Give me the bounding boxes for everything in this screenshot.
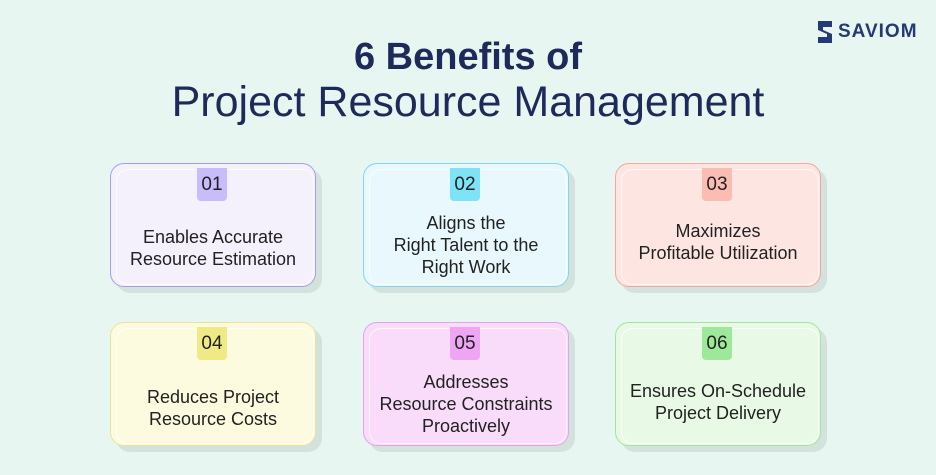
card 05: Resource Constraints bbox=[379, 394, 553, 414]
title: Project Resource Management bbox=[172, 78, 764, 126]
card 02: 02 bbox=[454, 174, 476, 195]
card 03 bbox=[615, 163, 827, 293]
logo: SAVIOM: SAVIOM bbox=[838, 21, 918, 42]
card 02: Right Talent to the bbox=[394, 235, 538, 255]
card 04 bbox=[110, 322, 322, 452]
card 04: 04 bbox=[201, 333, 223, 354]
card 03: Profitable Utilization bbox=[638, 243, 798, 263]
card 03: Maximizes bbox=[675, 221, 760, 241]
card 05 bbox=[363, 322, 575, 452]
card 02 bbox=[363, 163, 575, 293]
card 05: 05 bbox=[454, 333, 476, 354]
card 06: Project Delivery bbox=[655, 403, 781, 423]
card 01: Enables Accurate bbox=[143, 227, 283, 247]
card 05: Addresses bbox=[423, 372, 509, 392]
title bbox=[172, 36, 764, 126]
card 01: 01 bbox=[201, 174, 223, 195]
card 05: Proactively bbox=[422, 416, 510, 436]
card 06: Ensures On-Schedule bbox=[630, 381, 806, 401]
card 04: Resource Costs bbox=[149, 409, 277, 429]
card 02: Right Work bbox=[422, 257, 510, 277]
card 06 bbox=[615, 322, 827, 452]
card 01 bbox=[110, 163, 322, 293]
card 01: Resource Estimation bbox=[130, 249, 296, 269]
card 02: Aligns the bbox=[426, 213, 506, 233]
title: 6 Benefits of bbox=[354, 36, 582, 78]
card 06: 06 bbox=[706, 333, 728, 354]
card 03: 03 bbox=[706, 174, 728, 195]
card 04: Reduces Project bbox=[147, 387, 279, 407]
